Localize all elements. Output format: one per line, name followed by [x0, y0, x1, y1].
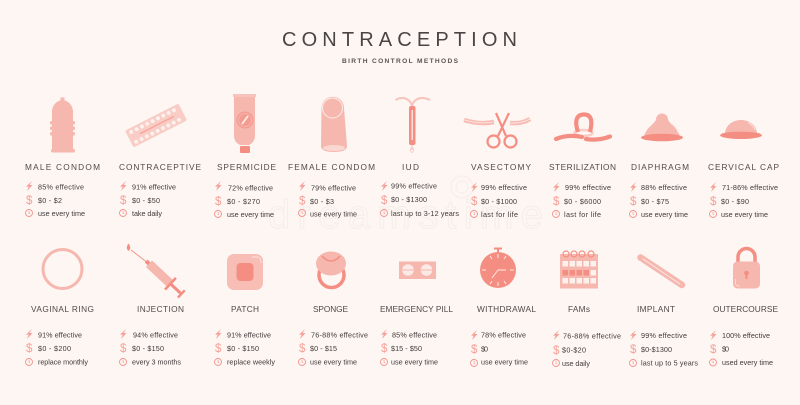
stats: [26, 181, 85, 218]
stats: $: [215, 343, 222, 355]
label: INJECTION: [137, 304, 184, 314]
stats: every 3 months: [132, 358, 181, 366]
panel: contraceptive: [119, 103, 201, 218]
stats: [298, 329, 368, 366]
label: IUD: [402, 162, 419, 172]
stats: [298, 181, 357, 218]
stats: $: [710, 196, 717, 208]
stats: replace weekly: [227, 358, 275, 366]
panel: male condom: [25, 98, 100, 218]
label: SPERMICIDE: [217, 162, 276, 172]
stats: 99% effective: [481, 183, 527, 192]
stats: $0 - $150: [227, 344, 259, 353]
stats: $0: [481, 344, 488, 354]
stats: last up to 3-12 years: [391, 209, 459, 218]
stats: $: [471, 196, 478, 208]
label: DIAPHRAGM: [631, 162, 689, 172]
subtitle: BIRTH CONTROL METHODS: [342, 58, 459, 65]
stats: $0-$20: [562, 346, 586, 354]
stats: [710, 182, 778, 219]
label: CERVICAL CAP: [708, 162, 779, 172]
stats: [380, 329, 438, 366]
label: FAMs: [568, 304, 590, 314]
stats: $: [215, 196, 222, 208]
label: EMERGENCY PILL: [380, 304, 453, 314]
panel: diaphragm: [630, 114, 689, 219]
stats: 76-88% effective: [563, 332, 621, 340]
panel: cervical cap: [708, 120, 779, 219]
panel: outercourse: [710, 248, 778, 367]
stats: used every time: [722, 358, 773, 367]
stats: [470, 182, 527, 219]
stats: 100% effective: [722, 331, 770, 340]
icon: female condom: [321, 97, 347, 152]
label: VAGINAL RING: [31, 304, 94, 314]
stats: take daily: [132, 209, 162, 218]
title: CONTRACEPTION: [282, 29, 517, 51]
icon: sponge: [316, 252, 346, 288]
panel: patch: [214, 254, 275, 366]
icon: male condom: [50, 98, 75, 152]
stats: [552, 182, 611, 219]
stats: 79% effective: [311, 184, 356, 192]
stats: 94% effective: [133, 330, 178, 340]
icon: cervical cap: [720, 120, 762, 139]
icon: patch: [227, 254, 263, 290]
icon: syringe: [127, 244, 188, 301]
icon: emergency pills: [399, 262, 436, 279]
stats: 91% effective: [38, 330, 82, 340]
stats: [214, 329, 275, 366]
icon: scissors and tubes: [464, 113, 530, 148]
icon: pill pack: [125, 103, 187, 148]
icon: tied tube: [556, 114, 610, 140]
stats: $0 - $150: [132, 344, 164, 353]
stats: use every time: [310, 358, 357, 366]
stats: [120, 329, 181, 366]
stats: 88% effective: [641, 183, 687, 192]
stats: $: [26, 343, 33, 355]
stats: $0: [722, 344, 729, 354]
stats: use every time: [641, 210, 688, 219]
panel: FAMs: [552, 251, 621, 368]
stats: $0 - $3: [310, 197, 334, 206]
panel: sponge: [298, 252, 368, 366]
stats: use every time: [227, 210, 274, 219]
panel: vasectomy: [464, 113, 531, 219]
panel: spermicide: [214, 94, 276, 219]
stats: [380, 181, 459, 218]
label: FEMALE CONDOM: [288, 162, 375, 172]
icon: padlock: [733, 248, 760, 288]
icon: calendar: [560, 251, 598, 288]
label: OUTERCOURSE: [713, 304, 778, 314]
stats: 85% effective: [392, 330, 437, 340]
stats: 85% effective: [38, 182, 84, 192]
stats: [26, 329, 88, 366]
stats: $: [120, 343, 127, 355]
stats: $0 - $50: [132, 196, 160, 205]
label: PATCH: [231, 304, 259, 314]
stats: $0 - $75: [641, 197, 669, 206]
stats: [630, 182, 688, 219]
stats: use every time: [391, 358, 438, 366]
stats: use every time: [721, 210, 768, 219]
stats: $: [710, 344, 717, 356]
panel: implant: [630, 258, 698, 368]
stats: last for life: [564, 210, 601, 219]
icon: implant rod: [640, 258, 682, 285]
stats: $: [381, 343, 388, 355]
label: MALE CONDOM: [25, 162, 100, 172]
stats: 76-88% effective: [311, 330, 368, 340]
label: IMPLANT: [637, 304, 675, 314]
stats: $0 - $2: [38, 196, 62, 205]
stats: $0 - $1300: [391, 195, 427, 204]
stats: 91% effective: [132, 182, 176, 192]
stats: 99% effective: [391, 182, 437, 190]
stats: $: [299, 343, 306, 355]
stats: $15 - $50: [391, 344, 422, 353]
stats: [552, 330, 621, 368]
icon: tube: [233, 94, 256, 153]
label: VASECTOMY: [471, 162, 531, 172]
label: SPONGE: [313, 304, 348, 314]
stats: 78% effective: [481, 330, 526, 340]
stats: $: [299, 196, 306, 208]
stats: [470, 330, 528, 366]
panel: IUD: [380, 98, 459, 218]
stats: $0 - $200: [38, 344, 71, 353]
stats: $0 - $6000: [564, 197, 601, 206]
icon: IUD: [396, 98, 430, 152]
stats: use every time: [38, 209, 85, 218]
stats: 99% effective: [565, 183, 611, 192]
stats: $0 - $270: [227, 197, 260, 206]
panel: female condom: [288, 97, 375, 218]
stats: $0-$1300: [641, 345, 672, 354]
panel: vaginal ring: [26, 250, 94, 366]
stats: [120, 181, 176, 218]
stats: $: [381, 195, 388, 207]
stats: $: [26, 195, 33, 207]
panel: withdrawal: [470, 248, 536, 366]
stats: $: [553, 345, 560, 357]
stats: $: [630, 196, 637, 208]
stats: last up to 5 years: [641, 358, 698, 368]
stats: $0 - $15: [310, 344, 337, 353]
stats: replace monthly: [38, 358, 88, 366]
stats: last for life: [481, 210, 518, 219]
label: WITHDRAWAL: [477, 304, 536, 314]
stats: 71-86% effective: [722, 183, 778, 192]
stats: [214, 181, 274, 219]
stats: $: [553, 196, 560, 208]
stats: $0 - $90: [721, 197, 749, 206]
icon: diaphragm: [641, 114, 683, 141]
stats: $: [471, 344, 478, 356]
stats: use daily: [562, 359, 590, 368]
icon: stopwatch: [480, 248, 516, 288]
stats: use every time: [310, 210, 357, 218]
watermark: dreamstime: [268, 193, 543, 237]
stats: 91% effective: [227, 330, 271, 340]
icon: ring: [43, 250, 82, 288]
stats: $: [120, 195, 127, 207]
label: CONTRACEPTIVE: [119, 162, 201, 172]
stats: 72% effective: [228, 184, 273, 192]
panel: injection: [120, 244, 188, 366]
stats: [630, 330, 698, 368]
stats: $: [630, 344, 637, 356]
stats: $0 - $1000: [481, 197, 517, 206]
stats: [710, 330, 773, 367]
panel: emergency pill: [380, 262, 453, 366]
stats: 99% effective: [641, 331, 687, 340]
stats: use every time: [481, 358, 528, 366]
label: STERILIZATION: [549, 162, 616, 172]
panel: sterilization: [549, 114, 616, 219]
